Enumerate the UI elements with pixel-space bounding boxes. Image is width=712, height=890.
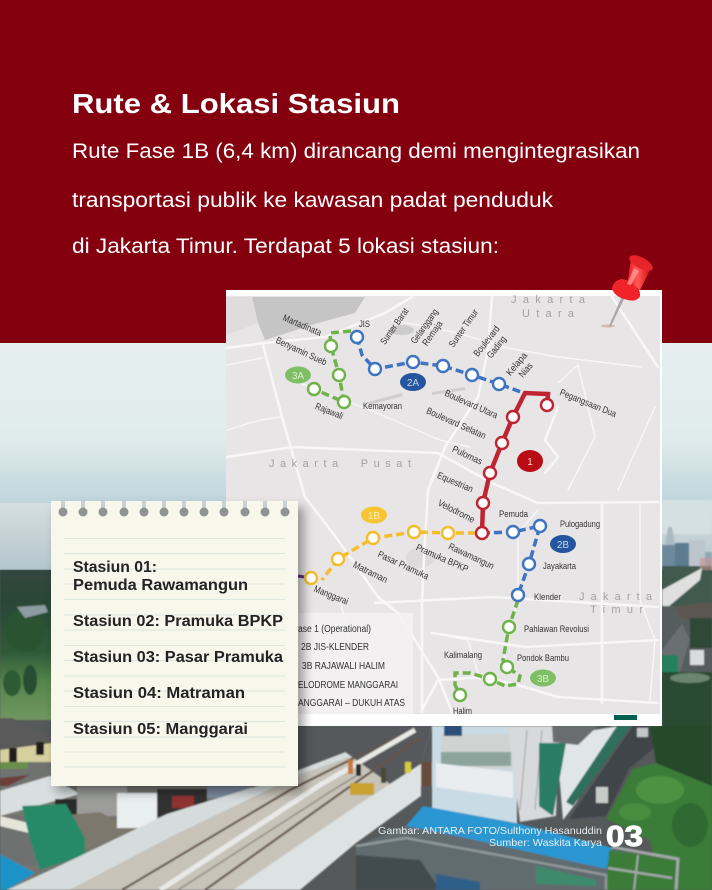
facade panels — [556, 726, 619, 820]
station list text: Stasiun 01: — [73, 559, 157, 576]
station labels: Kelapa — [504, 350, 530, 378]
map roads — [227, 297, 658, 712]
panel: route map — [226, 290, 662, 726]
line badges: 1 — [527, 457, 533, 468]
station labels: Sunter Barat — [378, 306, 412, 347]
left house — [0, 718, 52, 750]
station labels: Rajawali — [313, 401, 344, 422]
station labels: Pondok Bambu — [517, 653, 569, 664]
line badges: 3A — [292, 371, 304, 382]
region labels — [269, 294, 653, 616]
line 1B yellow — [298, 526, 476, 584]
station list text: Stasiun 05: Manggarai — [73, 721, 248, 738]
station labels: Benyamin Sueb — [274, 335, 328, 368]
trees right — [606, 763, 712, 890]
legend box: 2B JIS-KLENDER — [301, 642, 369, 653]
region labels: Jakarta — [579, 591, 653, 603]
station labels: Pulomas — [450, 444, 484, 468]
station labels: Matraman — [351, 560, 389, 586]
station list text: Stasiun 03: Pasar Pramuka — [73, 649, 283, 666]
line 3A green — [308, 331, 351, 408]
legend box: 3B RAJAWALI HALIM — [302, 661, 385, 672]
station labels: Sunter Timur — [447, 307, 481, 350]
station labels: Remaja — [420, 318, 446, 348]
paper ruled lines — [64, 538, 285, 767]
station labels: Halim — [453, 706, 472, 717]
station labels: JIS — [359, 319, 370, 330]
left trees — [0, 570, 52, 720]
station labels: Pegangsaan Dua — [558, 387, 618, 420]
region labels: Timur — [590, 604, 643, 616]
station labels — [274, 306, 618, 717]
legend box — [297, 613, 413, 714]
page number: 03 — [606, 821, 643, 853]
station labels: Boulevard Selatan — [425, 406, 487, 442]
lower photo: left side buildings — [0, 786, 240, 890]
image and source credit: Gambar: ANTARA FOTO/Sulthony Hasanuddin — [378, 825, 602, 837]
title: Rute & Lokasi Stasiun — [72, 88, 400, 119]
station labels: Velodrome — [436, 498, 476, 526]
station labels: Equestrian — [435, 470, 475, 495]
station labels: Nias — [517, 361, 536, 380]
station labels: Pramuka BPKP — [414, 542, 470, 575]
line 1 red — [476, 393, 553, 539]
legend box: ase 1 (Operational) — [298, 624, 371, 635]
station labels: Klender — [534, 592, 561, 603]
legend box: ANGGARAI – DUKUH ATAS — [298, 698, 405, 709]
station list text — [73, 559, 283, 738]
intro text: di Jakarta Timur. Terdapat 5 lokasi stasiun: — [72, 235, 499, 258]
station list text: Stasiun 04: Matraman — [73, 685, 245, 702]
region labels: Jakarta Pusat — [269, 458, 411, 470]
legend box: ELODROME MANGGARAI — [298, 680, 398, 691]
station labels: Pasar Pramuka — [376, 549, 431, 583]
image and source credit — [378, 825, 602, 849]
intro text — [72, 140, 640, 258]
station labels: Jayakarta — [543, 561, 577, 572]
red header background — [0, 0, 712, 343]
station labels: Pulogadung — [560, 519, 600, 530]
intro text: transportasi publik ke kawasan padat penduduk — [72, 189, 554, 212]
left viaduct wall — [7, 748, 356, 890]
station labels: Martadinata — [281, 313, 324, 339]
icon: red push pin — [601, 252, 655, 328]
station labels: Manggarai — [312, 584, 350, 608]
station labels: Kalimalang — [444, 650, 482, 661]
line badges: 2B — [557, 540, 569, 551]
road — [569, 726, 656, 819]
station building — [432, 726, 517, 826]
line 2B blue — [482, 520, 546, 595]
line badges: 2A — [407, 378, 419, 389]
line 3B green — [454, 589, 524, 701]
station list text: Stasiun 02: Pramuka BPKP — [73, 613, 283, 630]
station labels: Boulevard — [472, 324, 502, 359]
station labels: Gelanggang — [409, 307, 441, 346]
right viaduct wall — [233, 764, 421, 890]
steel structure — [356, 826, 678, 890]
workers — [348, 760, 353, 774]
region labels: Jakarta — [511, 294, 586, 306]
station labels: Pahlawan Revolusi — [524, 624, 589, 635]
paper holes — [58, 501, 290, 516]
line badges: 1B — [368, 511, 380, 522]
line badges: 3B — [537, 674, 549, 685]
right skyline — [662, 500, 712, 534]
region labels: Utara — [522, 308, 575, 320]
station labels: Boulevard Utara — [443, 388, 500, 422]
background photo: elevated rail construction — [0, 343, 712, 890]
blue roof — [406, 806, 613, 869]
line 2A blue — [351, 331, 521, 392]
station labels: Kemayoran — [363, 401, 402, 412]
track deck — [70, 726, 432, 890]
line badges — [285, 366, 576, 686]
station labels: Pemuda — [499, 509, 529, 520]
image and source credit: Sumber: Waskita Karya — [489, 837, 602, 849]
station list text: Pemuda Rawamangun — [73, 577, 248, 594]
intro text: Rute Fase 1B (6,4 km) dirancang demi mengintegrasikan — [72, 140, 640, 163]
panel: notepaper station list — [51, 501, 304, 792]
station labels: Gading — [485, 334, 509, 361]
station labels: Rawamangun — [447, 541, 496, 572]
